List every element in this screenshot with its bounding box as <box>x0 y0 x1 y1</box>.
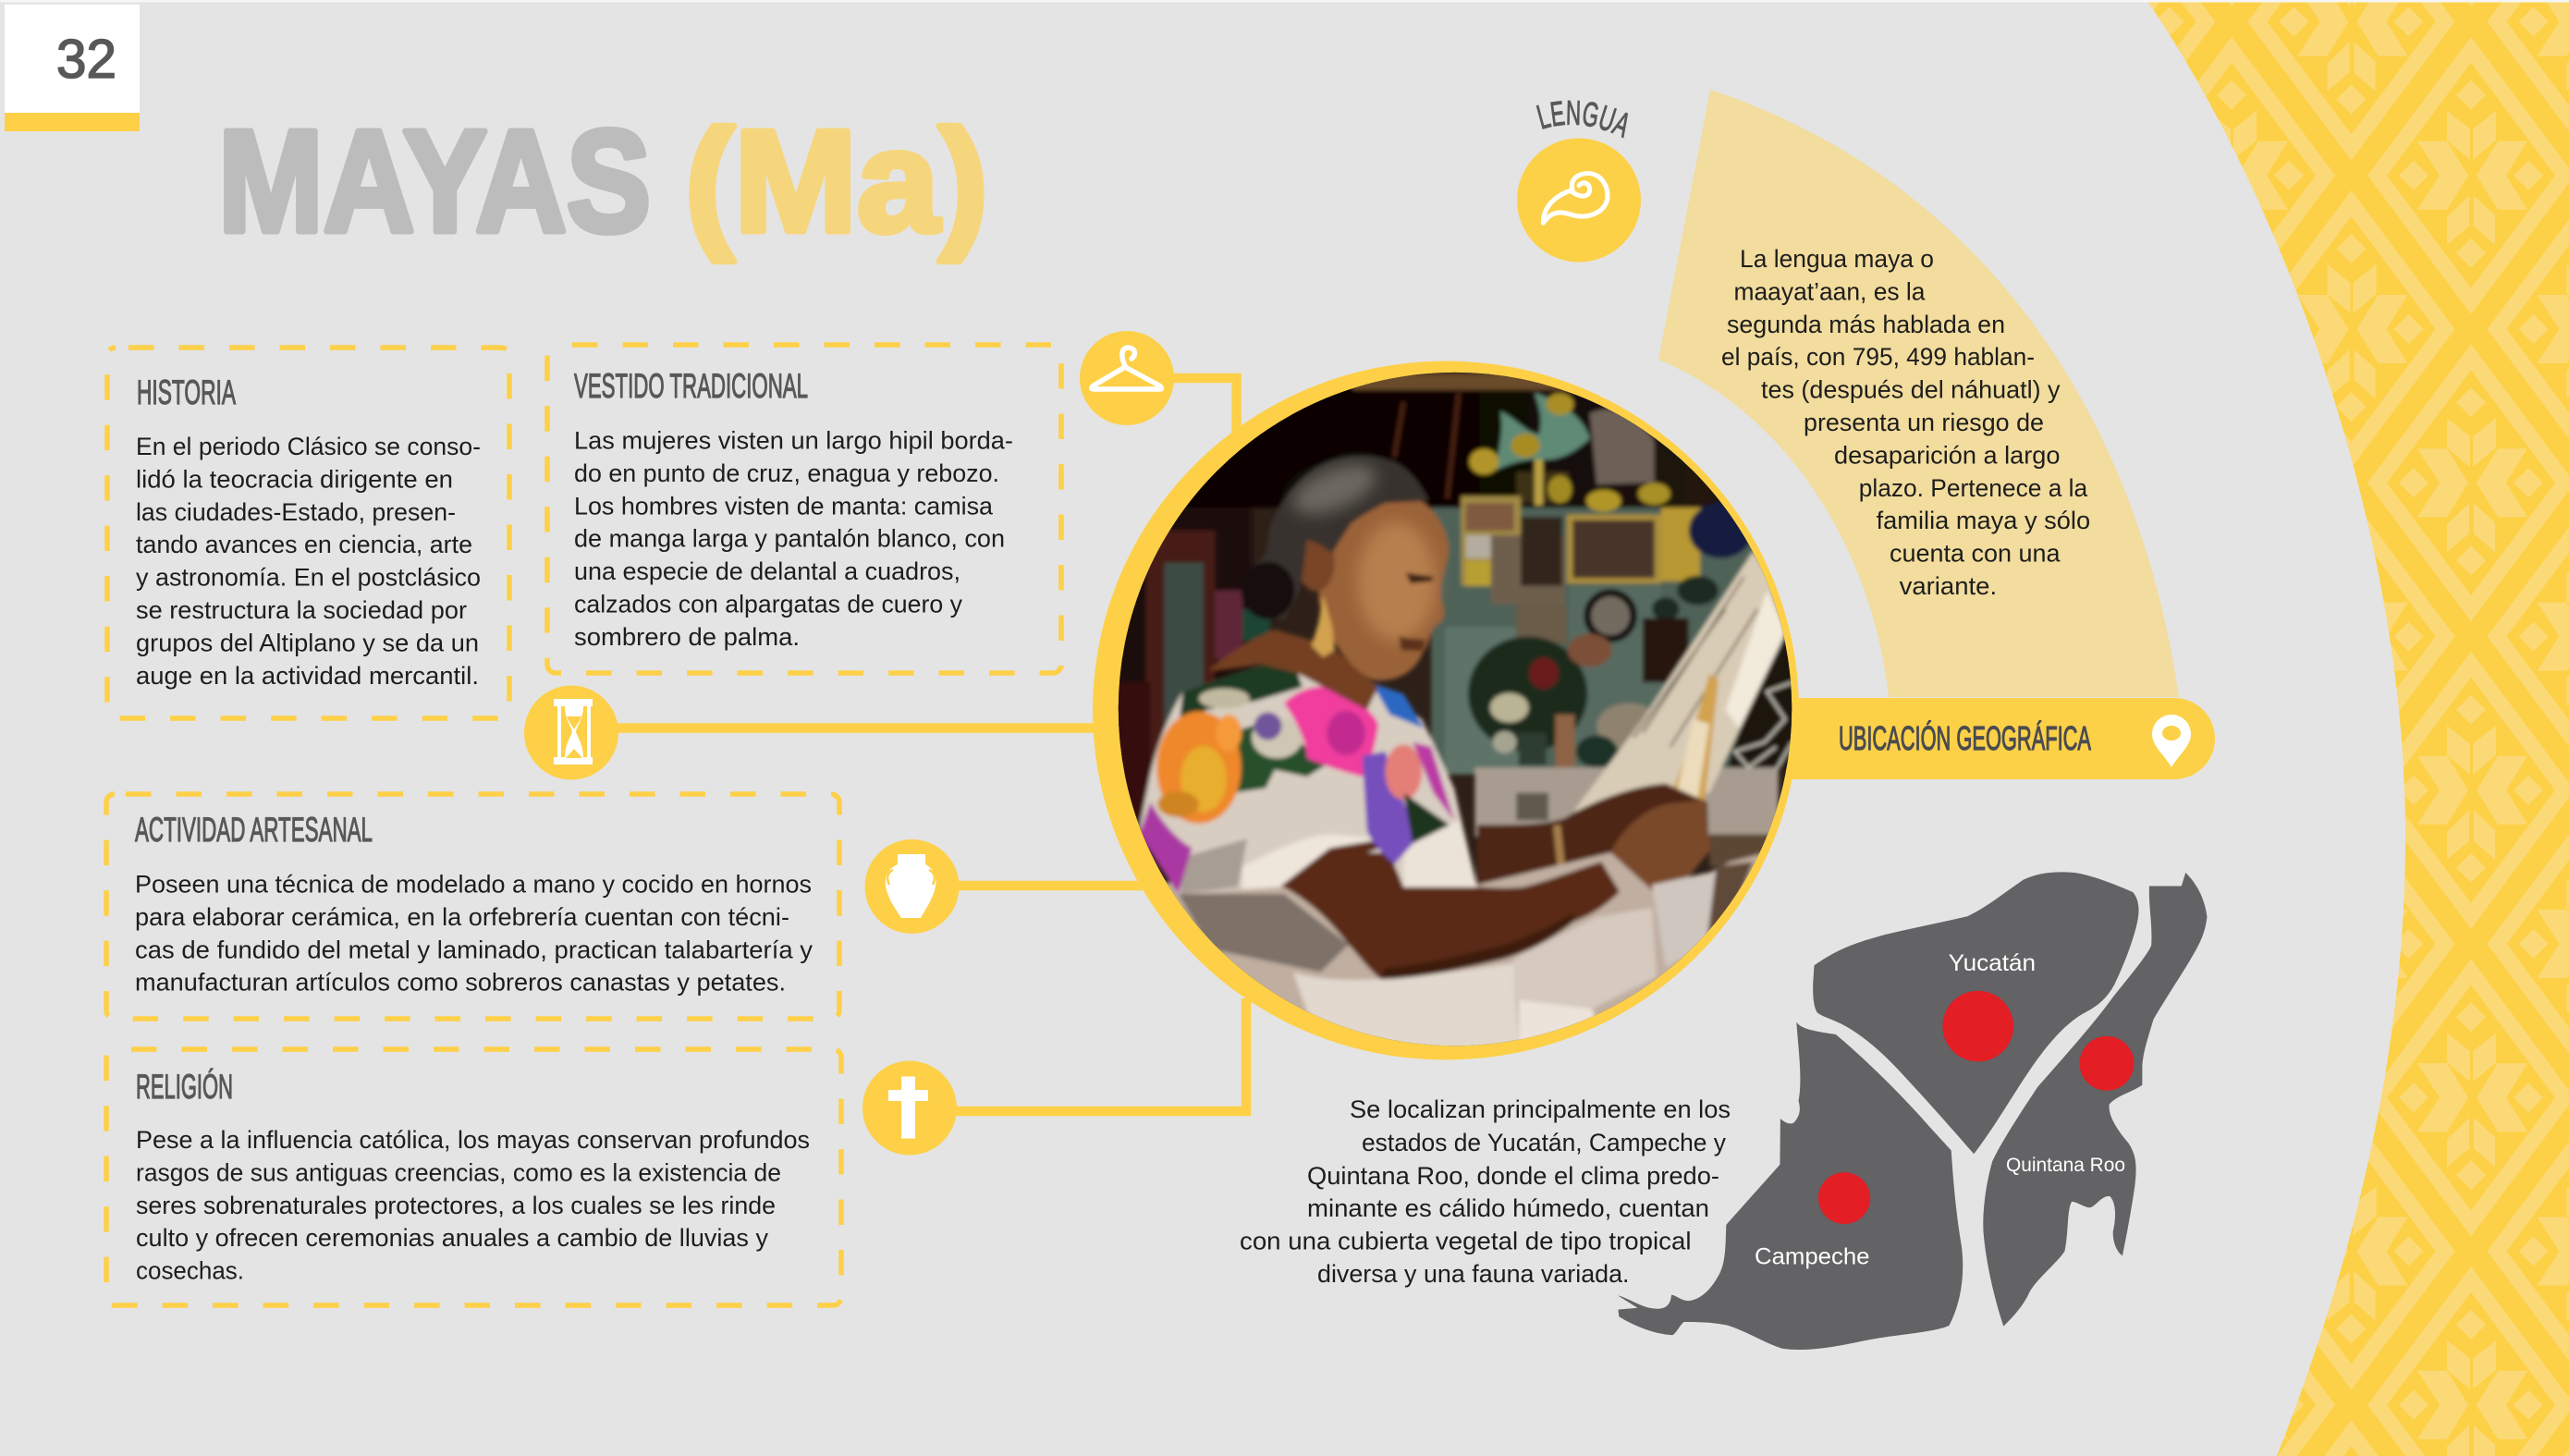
body: vestido <box>574 427 1013 651</box>
body: historia: y astronomía. En el postclásico <box>136 564 481 592</box>
icon: hourglass <box>524 686 618 780</box>
title: MAYAS <box>218 101 651 263</box>
location dot: campeche <box>1818 1172 1870 1224</box>
wall decorations <box>1496 393 1590 470</box>
body: vestido: sombrero de palma. <box>574 623 800 651</box>
location dot: quintana roo <box>2080 1036 2134 1091</box>
body: actividad <box>135 871 814 997</box>
location description: diversa y una fauna variada. <box>1317 1260 1629 1288</box>
body: religion: culto y ofrecen ceremonias anuales a cambio de lluvias y <box>136 1224 769 1252</box>
body: historia: tando avances en ciencia, arte <box>136 531 472 558</box>
hammock <box>1573 551 1786 812</box>
lengua text: La lengua maya o <box>1740 245 1934 273</box>
body: actividad: manufacturan artículos como sobreros canastas y petates. <box>135 969 786 997</box>
lengua fan shape <box>1658 90 2179 697</box>
body: historia: las ciudades-Estado, presen- <box>136 498 456 526</box>
location description: con una cubierta vegetal de tipo tropical <box>1240 1228 1692 1255</box>
body: historia: lidó la teocracia dirigente en <box>136 465 453 493</box>
body: religion: rasgos de sus antiguas creencias, como es la existencia de <box>136 1158 781 1186</box>
lengua heading: LENGUA <box>1536 100 1629 139</box>
body: vestido: una especie de delantal a cuadros, <box>574 557 960 585</box>
panel: vestido tradicional <box>547 345 1061 673</box>
heading: actividad artesanal: ACTIVIDAD ARTESANAL <box>135 811 373 849</box>
lengua text: variante. <box>1900 572 1997 600</box>
body: historia: auge en la actividad mercantil. <box>136 662 479 690</box>
body: actividad: Poseen una técnica de modelado a mano y cocido en hornos <box>135 871 812 899</box>
page number tab <box>5 5 140 131</box>
region: campeche <box>1618 1022 1963 1350</box>
lengua heading <box>1536 100 1629 139</box>
heading: vestido tradicional: VESTIDO TRADICIONAL <box>574 367 808 405</box>
lengua text: familia maya y sólo <box>1877 507 2090 534</box>
location description: Quintana Roo, donde el clima predo- <box>1307 1162 1719 1190</box>
heading: religion: RELIGIÓN <box>136 1068 233 1106</box>
body: historia: grupos del Altiplano y se da un <box>136 629 479 656</box>
lengua text <box>1721 245 2090 600</box>
wall and ceiling <box>1431 498 1767 775</box>
location description: estados de Yucatán, Campeche y <box>1362 1129 1727 1156</box>
label: campeche: Campeche <box>1755 1244 1869 1270</box>
map: peninsula de yucatan <box>1618 872 2207 1350</box>
body: historia <box>136 433 481 690</box>
shuttle <box>1670 673 1719 800</box>
background pattern band <box>2126 0 2569 1456</box>
heading: historia: HISTORIA <box>137 373 236 411</box>
panel: actividad artesanal <box>106 794 839 1019</box>
earring <box>1312 595 1335 657</box>
location dot: yucatan <box>1942 991 2013 1061</box>
lengua text: cuenta con una <box>1890 540 2061 568</box>
location description: minante es cálido húmedo, cuentan <box>1307 1194 1709 1222</box>
lengua text: segunda más hablada en <box>1727 311 2005 338</box>
body: historia: En el periodo Clásico se conso- <box>136 433 481 460</box>
lengua text: maayat’aan, es la <box>1734 277 1926 305</box>
body: religion: Pese a la influencia católica, los mayas conservan profundos <box>136 1126 810 1154</box>
body: vestido: do en punto de cruz, enagua y rebozo. <box>574 459 999 487</box>
icon: lengua speech curl <box>1517 139 1641 263</box>
body: vestido: de manga larga y pantalón blanco, con <box>574 525 1005 553</box>
body: vestido: Los hombres visten de manta: camisa <box>574 492 993 520</box>
blouse <box>1139 664 1477 894</box>
photo: woman embroidering hammock <box>1109 365 1804 1064</box>
hair <box>1242 456 1429 620</box>
body: religion: cosechas. <box>136 1257 244 1285</box>
panel: historia <box>107 348 509 718</box>
body: religion <box>136 1126 810 1285</box>
photo ring <box>1093 361 1799 1059</box>
panel: religion <box>106 1049 841 1305</box>
heading: ubicacion geografica: UBICACIÓN GEOGRÁFICA <box>1839 719 2091 757</box>
embroidery <box>1178 660 1304 720</box>
near arm <box>1279 842 1620 979</box>
body: actividad: cas de fundido del metal y laminado, practican talabartería y <box>135 936 814 963</box>
connectors <box>610 378 1246 1111</box>
region: quintana roo <box>1983 873 2207 1327</box>
icon: clay vase <box>865 839 960 934</box>
icon: map pin <box>2152 715 2191 767</box>
body: historia: se restructura la sociedad por <box>136 596 467 624</box>
body: vestido: Las mujeres visten un largo hipil borda- <box>574 427 1013 455</box>
body: vestido: calzados con alpargatas de cuero y <box>574 590 963 618</box>
label: yucatan: Yucatán <box>1949 950 2036 976</box>
region: yucatan <box>1813 872 2138 1154</box>
page number tab: 32 <box>56 29 116 90</box>
neck and face <box>1208 630 1378 710</box>
title: (Ma) <box>685 101 988 263</box>
location pill <box>1756 698 2215 779</box>
lengua text: desaparición a largo <box>1834 441 2060 469</box>
icon: cross <box>862 1061 957 1156</box>
lengua text: presenta un riesgo de <box>1804 409 2044 436</box>
lengua text: plazo. Pertenece a la <box>1859 474 2087 502</box>
body: religion: seres sobrenaturales protectores, a los cuales se les rinde <box>136 1192 776 1219</box>
body: actividad: para elaborar cerámica, en la orfebrería cuentan con técni- <box>135 903 789 931</box>
right background and net <box>1728 636 1799 767</box>
location description: Se localizan principalmente en los <box>1350 1095 1731 1123</box>
bouquet and altar <box>1468 636 1587 752</box>
location description <box>1240 1095 1731 1288</box>
table <box>1474 767 1779 837</box>
lower dress <box>1165 849 1760 1040</box>
lengua text: el país, con 795, 499 hablan- <box>1721 343 2035 371</box>
icon: hanger <box>1080 331 1174 425</box>
title <box>218 101 988 263</box>
far arm <box>1477 784 1709 887</box>
label: quintana roo: Quintana Roo <box>2006 1155 2125 1176</box>
lengua text: tes (después del náhuatl) y <box>1761 376 2061 404</box>
